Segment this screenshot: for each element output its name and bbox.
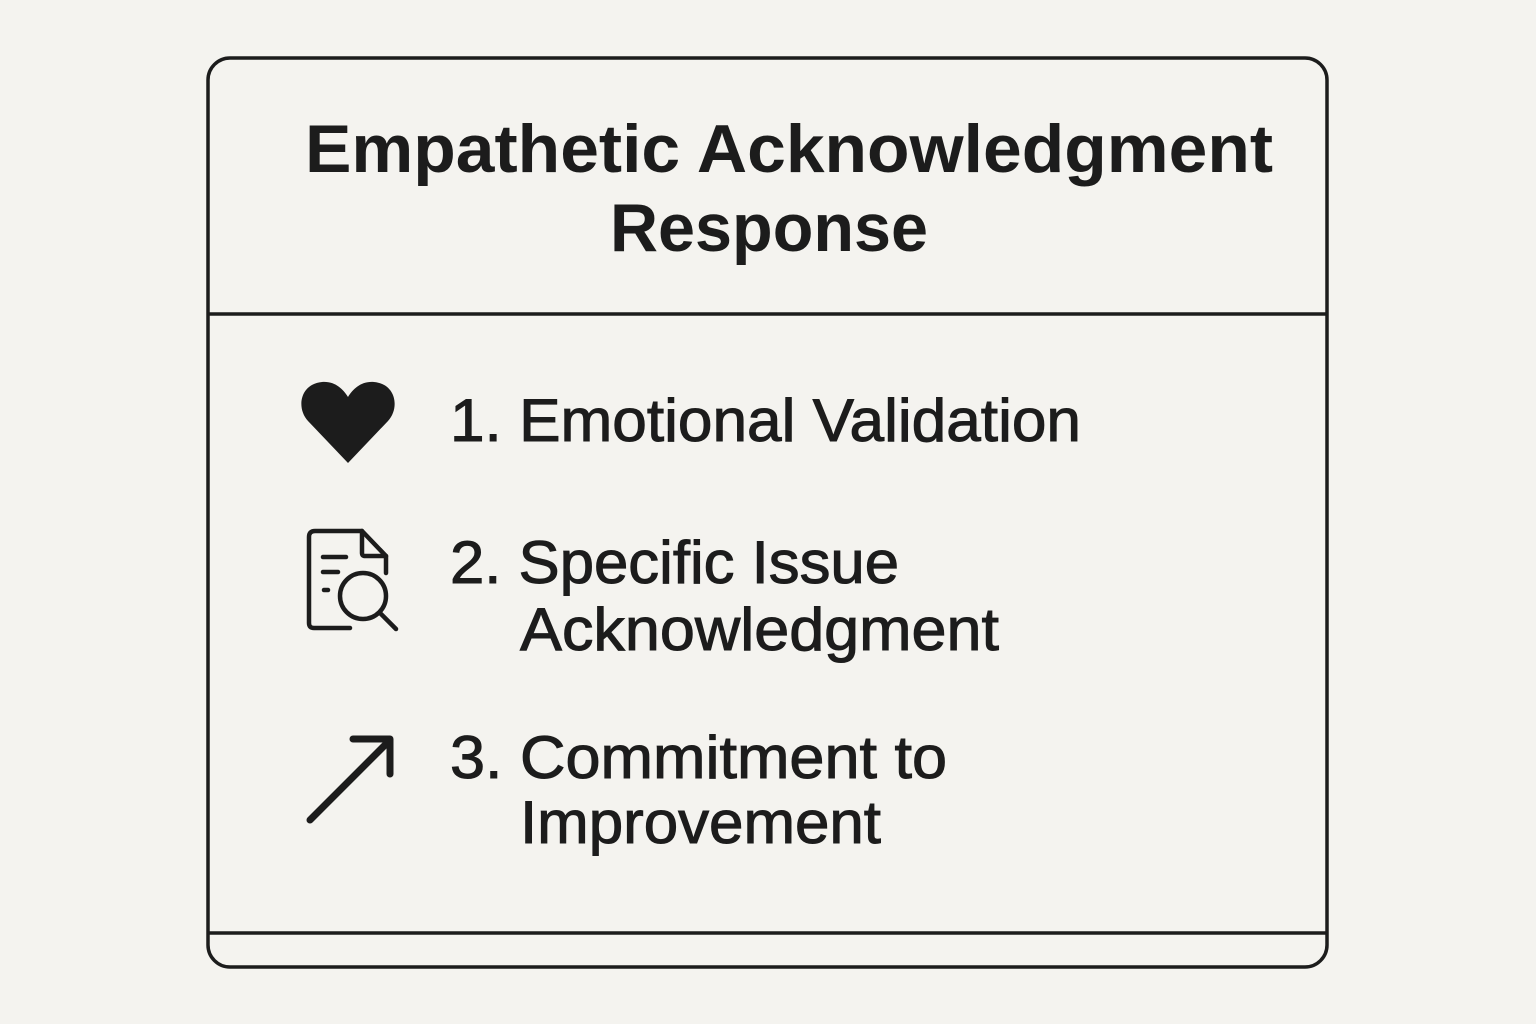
item 2 text: 2. Specific Issue — [450, 529, 899, 596]
item 3 text — [450, 724, 947, 856]
item 3 text: Improvement — [520, 789, 881, 856]
icon: heart — [301, 382, 395, 463]
icon: arrow up-right — [310, 739, 390, 820]
item 2 text: Acknowledgment — [520, 596, 999, 663]
title — [305, 111, 1273, 266]
icon: document search — [309, 531, 396, 629]
item 2 text — [450, 529, 999, 663]
item 1 text: 1. Emotional Validation — [450, 387, 1081, 454]
title: Response — [610, 190, 928, 266]
title: Empathetic Acknowledgment — [305, 111, 1273, 187]
item 3 text: 3. Commitment to — [450, 724, 947, 791]
panel: card — [208, 58, 1327, 967]
